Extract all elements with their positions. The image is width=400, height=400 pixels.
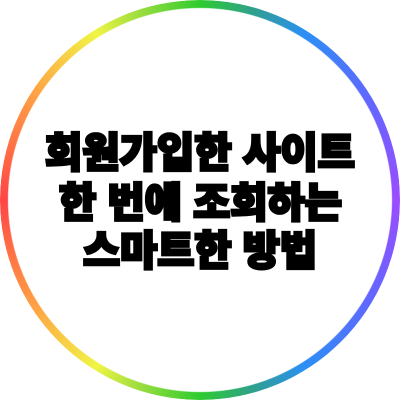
title line 1: 회원가입한 사이트	[45, 130, 355, 176]
title line 2: 한 번에 조회하는	[59, 180, 342, 226]
title line 3: 스마트한 방법	[83, 228, 317, 274]
